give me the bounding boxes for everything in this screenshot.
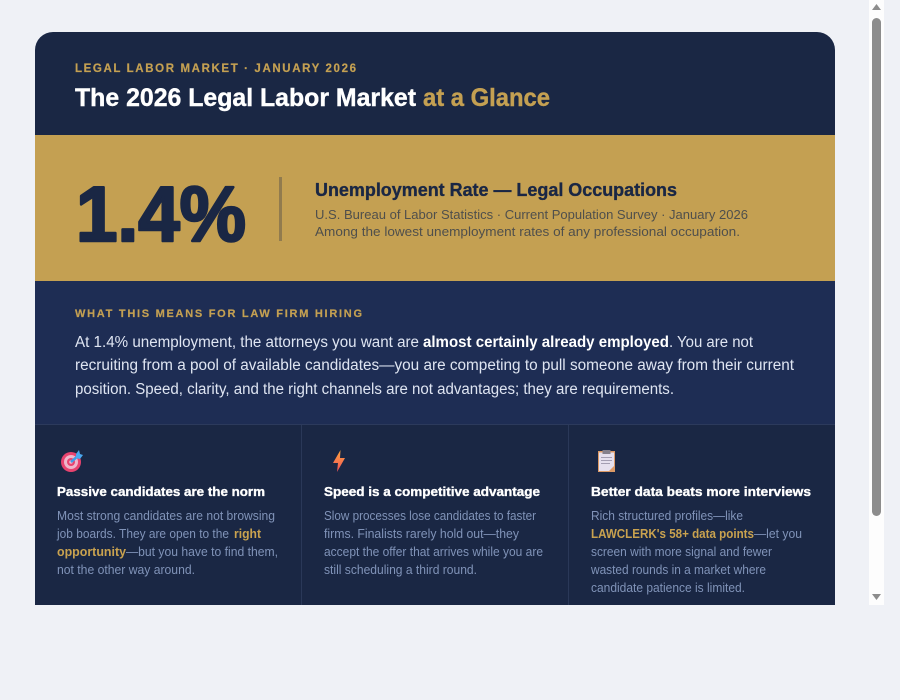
section heading: WHAT THIS MEANS FOR LAW FIRM HIRING (75, 308, 362, 320)
card body: not the other way around. (57, 563, 195, 577)
card: better data (590, 450, 811, 595)
eyebrow label: LEGAL LABOR MARKET · JANUARY 2026 (75, 63, 356, 75)
card body: candidate patience is limited. (591, 581, 745, 595)
card body: right (234, 527, 262, 541)
paragraph: . You are not (669, 334, 754, 351)
card body: opportunity (57, 545, 126, 559)
card body: still scheduling a third round. (324, 563, 477, 577)
stat description: U.S. Bureau of Labor Statistics · Current Population Survey · January 2026 (315, 207, 748, 222)
paragraph: recruiting from a pool of available candidates—you are competing to pull someone away from their current (75, 357, 795, 374)
card: speed (324, 450, 543, 577)
card heading: Speed is a competitive advantage (324, 484, 540, 499)
stat description: Among the lowest unemployment rates of any professional occupation. (315, 224, 740, 239)
card: passive candidates (56, 450, 278, 577)
card body: job boards. They are open to the (56, 527, 229, 541)
card body (56, 509, 278, 577)
card body: Most strong candidates are not browsing (57, 509, 275, 523)
card body: —let you (754, 527, 802, 541)
scrollbar (869, 0, 884, 605)
panel: header (35, 32, 835, 135)
icon: clipboard (598, 450, 615, 472)
card heading: Passive candidates are the norm (57, 484, 265, 499)
card body: screen with more signal and fewer (591, 545, 772, 559)
paragraph: At 1.4% unemployment, the attorneys you want are (75, 334, 419, 351)
card body: accept the offer that arrives while you are (324, 545, 543, 559)
card body: —but you have to find them, (126, 545, 278, 559)
panel: three insight cards (35, 424, 835, 605)
stat description: Unemployment Rate — Legal Occupations (315, 180, 677, 200)
icon: target with dart (61, 450, 83, 472)
card body: firms. Finalists rarely hold out—they (324, 527, 520, 541)
paragraph: almost certainly already employed (423, 334, 669, 351)
card body (590, 509, 802, 595)
panel: what this means (35, 281, 835, 424)
stat description (315, 180, 748, 239)
panel: unemployment stat band (35, 135, 835, 281)
title: at a Glance (423, 84, 550, 112)
icon: lightning bolt (333, 450, 345, 472)
card body: Rich structured profiles—like (591, 509, 743, 523)
card body: wasted rounds in a market where (590, 563, 766, 577)
big stat: 1.4%: 1.4% (76, 170, 246, 258)
panel: infographic card (35, 32, 835, 605)
card heading: Better data beats more interviews (591, 484, 811, 499)
card body: Slow processes lose candidates to faster (324, 509, 536, 523)
paragraph (75, 334, 795, 398)
card body: LAWCLERK's 58+ data points (591, 527, 754, 541)
paragraph: position. Speed, clarity, and the right channels are not advantages; they are requirements. (75, 381, 674, 398)
title: The 2026 Legal Labor Market (75, 84, 417, 112)
card body (324, 509, 543, 577)
